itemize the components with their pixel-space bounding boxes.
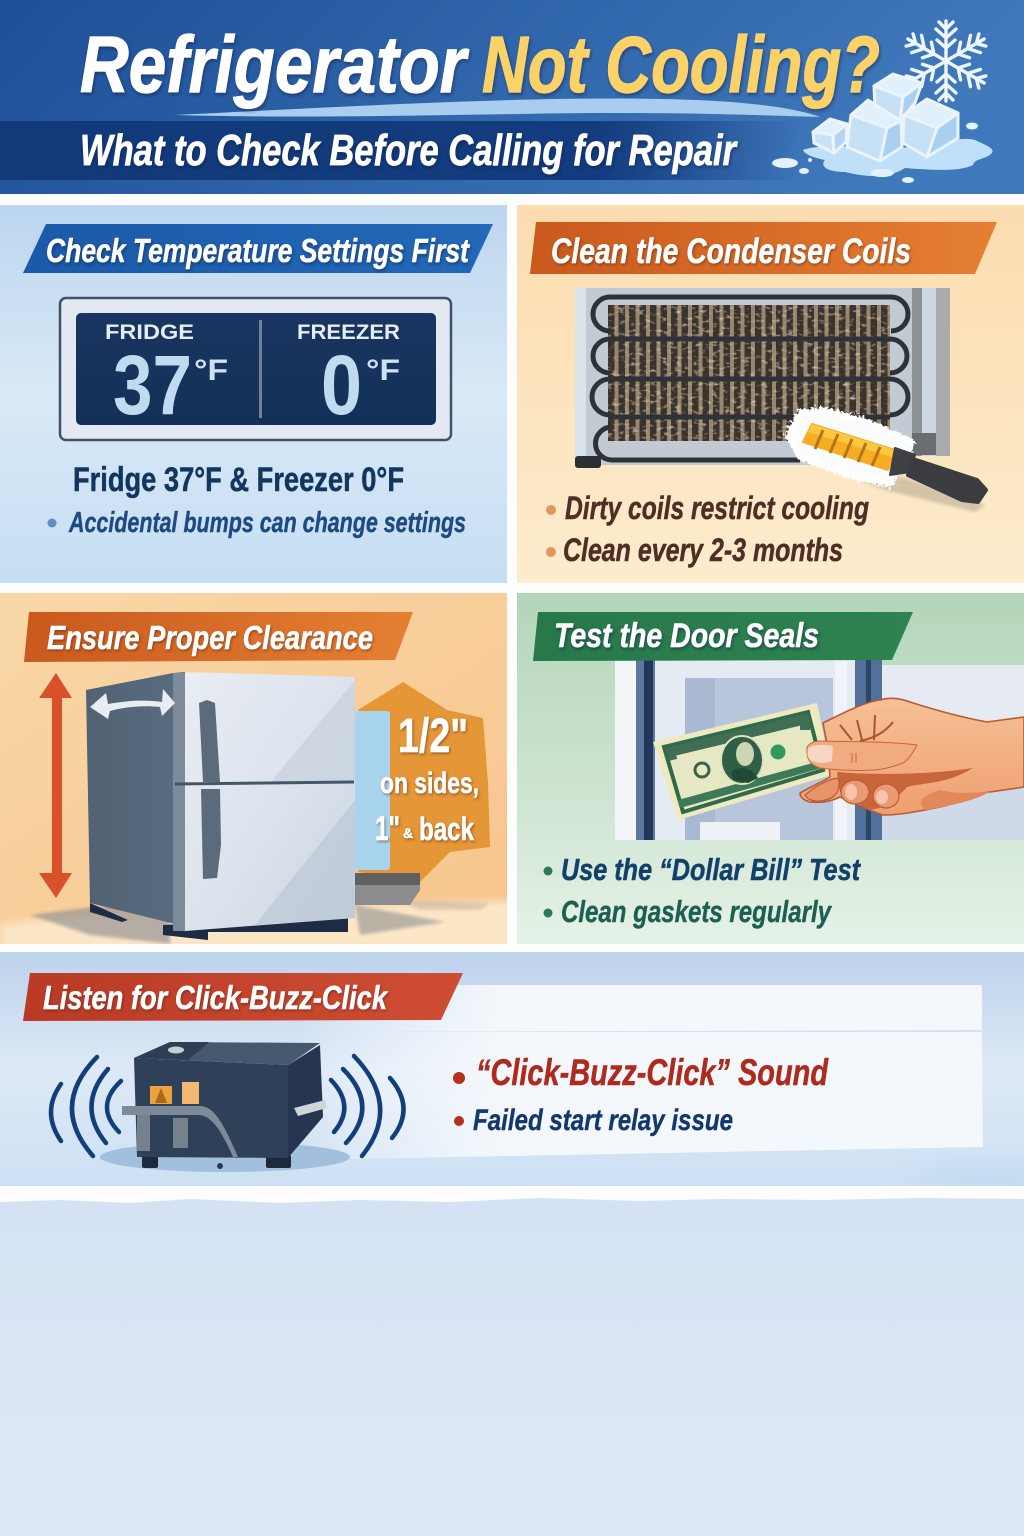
bullet: click buzz click sound: “Click-Buzz-Click” Sound — [476, 1052, 829, 1093]
header banner — [0, 0, 1024, 194]
callout card — [300, 985, 983, 1160]
heading: temperature — [23, 224, 493, 273]
title — [80, 20, 880, 109]
arrow: height clearance — [39, 673, 72, 898]
temperature display: °F — [194, 354, 228, 387]
temperature display: 0 — [321, 338, 362, 432]
bullet: accidental bumps: Accidental bumps can change settings — [68, 507, 466, 539]
illustration: hand holding bill — [800, 698, 1024, 815]
heading: coils: Clean the Condenser Coils — [551, 232, 911, 271]
icon: cleaning brush — [788, 410, 986, 512]
panel: check temperature settings — [0, 205, 507, 583]
icon: dollar bill — [653, 703, 832, 820]
callout: clearance measurements: on sides, — [380, 767, 479, 800]
callout: clearance measurements: 1/2" — [398, 710, 468, 763]
temperature display — [60, 298, 451, 440]
illustration: condenser coil — [575, 288, 950, 468]
lower empty area with torn edge — [0, 1198, 1024, 1536]
heading: temperature: Check Temperature Settings First — [46, 232, 471, 269]
heading: clearance — [24, 612, 413, 662]
callout: clearance measurements: back — [419, 811, 474, 847]
subtitle: What to Check Before Calling for Repair — [80, 126, 738, 175]
callout: clearance measurements: 1" — [375, 810, 400, 848]
panel: listen for click-buzz-click — [0, 952, 1024, 1196]
text: target temperatures: Fridge 37°F & Freezer 0°F — [73, 461, 404, 499]
heading: click buzz click: Listen for Click-Buzz-Click — [43, 979, 388, 1016]
bullet: dollar bill test: Use the “Dollar Bill” Test — [561, 852, 861, 887]
panel: clean the condenser coils — [517, 205, 1024, 583]
bullet: clean schedule: Clean every 2-3 months — [563, 532, 843, 568]
heading: door seals: Test the Door Seals — [554, 617, 819, 655]
temperature display: FREEZER — [297, 321, 400, 344]
panel: ensure proper clearance — [0, 593, 520, 950]
callout: clearance measurements — [375, 710, 479, 848]
panel: test the door seals — [517, 593, 1024, 944]
illustration: refrigerator — [86, 672, 355, 940]
icon: melting ice cubes — [772, 74, 993, 183]
illustration: orange backdrop and wall panel — [0, 682, 520, 950]
temperature display: 37 — [113, 338, 192, 432]
illustration: refrigerator door seal — [615, 660, 1024, 840]
heading: door seals — [533, 612, 913, 661]
heading: clearance: Ensure Proper Clearance — [47, 619, 373, 656]
arrow: side clearance — [90, 689, 175, 719]
title: Not Cooling? — [482, 20, 880, 109]
bullet: failed start relay: Failed start relay issue — [473, 1104, 733, 1137]
temperature display: °F — [366, 354, 400, 387]
bullet: dirty coils: Dirty coils restrict cooling — [565, 490, 869, 526]
bullet: clean gaskets: Clean gaskets regularly — [561, 894, 832, 929]
icon: snowflake — [903, 21, 989, 101]
callout: clearance measurements: & — [403, 825, 413, 841]
temperature display: FRIDGE — [105, 321, 194, 344]
illustration: compressor with sound waves — [51, 1042, 404, 1172]
title: Refrigerator — [80, 20, 469, 109]
